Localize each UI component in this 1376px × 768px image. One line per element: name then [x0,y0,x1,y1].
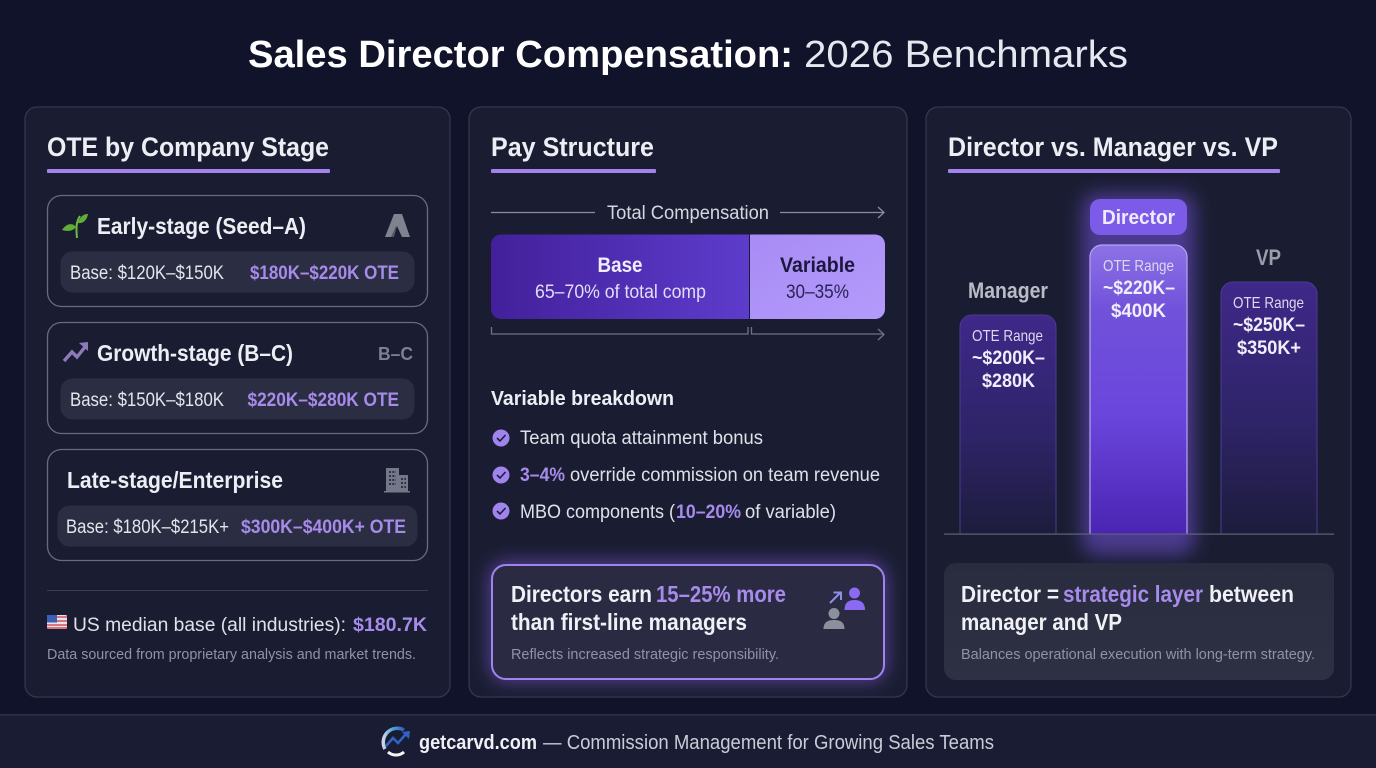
bar: VP [1221,245,1317,534]
bar: manager: $280K [982,371,1035,392]
callout: strategic layer [944,563,1334,680]
callout: directors earn more: Directors earn [511,581,652,607]
list item: MBO components: 10–20% [676,502,741,523]
list item: override commission: override commission on team revenue [570,465,880,486]
bar: director: Director [1102,207,1175,229]
bar: base segment: Base [598,254,642,277]
bar: director [1082,193,1195,555]
callout: strategic layer: strategic layer [1063,581,1203,607]
pill: early-stage figures: Base: $120K–$150K [70,263,224,284]
pill: growth-stage figures: Base: $150K–$180K [70,390,224,411]
bar: VP: VP [1256,245,1281,270]
bar: director: $400K [1111,301,1166,322]
footer: — Commission Management for Growing Sales Teams [543,732,994,754]
pill: early-stage figures: $180K–$220K OTE [250,263,399,284]
bar: VP: ~$250K– [1233,315,1305,336]
pill: growth-stage figures: $220K–$280K OTE [248,390,399,411]
bar: VP: OTE Range [1233,295,1304,312]
bar: base segment: 65–70% of total comp [535,282,706,303]
icon: trend arrow [64,342,88,361]
heading: Pay Structure [491,132,656,173]
bar chart: OTE range by role [944,193,1334,555]
bar: manager: Manager [968,278,1048,303]
card: late-stage [48,450,428,560]
icon: getcarvd logo [383,728,410,755]
bar: variable segment: 30–35% [786,282,849,303]
label: total compensation arrow [491,203,884,224]
pill: late-stage figures: $300K–$400K+ OTE [241,517,406,538]
card: growth-stage [48,322,428,434]
pill: growth-stage figures [60,378,414,420]
bar: variable segment: Variable [780,254,855,277]
brackets under bar [492,327,884,340]
footnote: data source: Data sourced from proprietary analysis and market trends. [47,647,416,663]
card: late-stage: Late-stage/Enterprise [67,467,283,493]
title: Sales Director Compensation: [248,34,793,76]
title [248,34,1128,76]
bar: director: OTE Range [1103,258,1174,275]
pill: early-stage figures [60,252,414,292]
callout: directors earn more: than first-line managers [511,609,747,635]
list item: MBO components: of variable) [745,502,836,523]
callout: strategic layer: manager and VP [961,609,1122,635]
callout: directors earn more: Reflects increased strategic responsibility. [511,647,779,663]
panel: pay structure [469,107,907,697]
pill: late-stage figures: Base: $180K–$215K+ [66,517,229,538]
title: 2026 Benchmarks [804,34,1128,76]
card: early-stage [48,196,428,306]
stat: US median base: US median base (all industries): [73,615,346,636]
list item: MBO components: MBO components ( [520,502,676,523]
callout: directors earn more [490,562,886,681]
callout: strategic layer: Director = [961,581,1059,607]
card: early-stage: Early-stage (Seed–A) [97,213,306,239]
bar: variable segment [750,234,885,319]
bar: director: ~$220K– [1103,278,1175,299]
callout: directors earn more: 15–25% more [656,581,786,607]
panel: director vs manager vs VP [926,107,1351,697]
stat: US median base: $180.7K [353,615,427,636]
icon: building [384,468,410,492]
callout: strategic layer: Balances operational execution with long-term strategy. [961,647,1315,663]
list item: override commission: 3–4% [520,465,565,486]
icon: seedling [62,214,88,238]
icon: promotion people [824,588,865,629]
bar: manager [960,278,1056,534]
bar: base segment [491,234,749,319]
heading: variable breakdown: Variable breakdown [491,388,674,410]
bar: manager: OTE Range [972,328,1043,345]
bar: manager: ~$200K– [972,348,1045,369]
footer: getcarvd.com [419,732,537,754]
panel: OTE by company stage [25,107,450,697]
callout: strategic layer: between [1209,581,1294,607]
heading: OTE by Company Stage [47,132,330,173]
footer [0,714,1376,768]
heading: OTE by Company Stage: OTE by Company Stage [47,132,329,162]
heading: Pay Structure: Pay Structure [491,132,654,162]
card: growth-stage: Growth-stage (B–C) [97,340,293,366]
list item: MBO components [492,502,836,523]
icon: A mark [385,214,410,237]
bar: VP: $350K+ [1237,338,1301,359]
heading: Director vs. Manager vs. VP: Director vs. Manager vs. VP [948,132,1278,162]
label: total compensation arrow: Total Compensation [607,203,769,224]
heading: Director vs. Manager vs. VP [948,132,1280,173]
badge: B-C: B–C [378,343,413,364]
icon: US flag [47,615,67,629]
list item: team quota: Team quota attainment bonus [520,428,763,449]
pill: late-stage figures [58,506,418,546]
